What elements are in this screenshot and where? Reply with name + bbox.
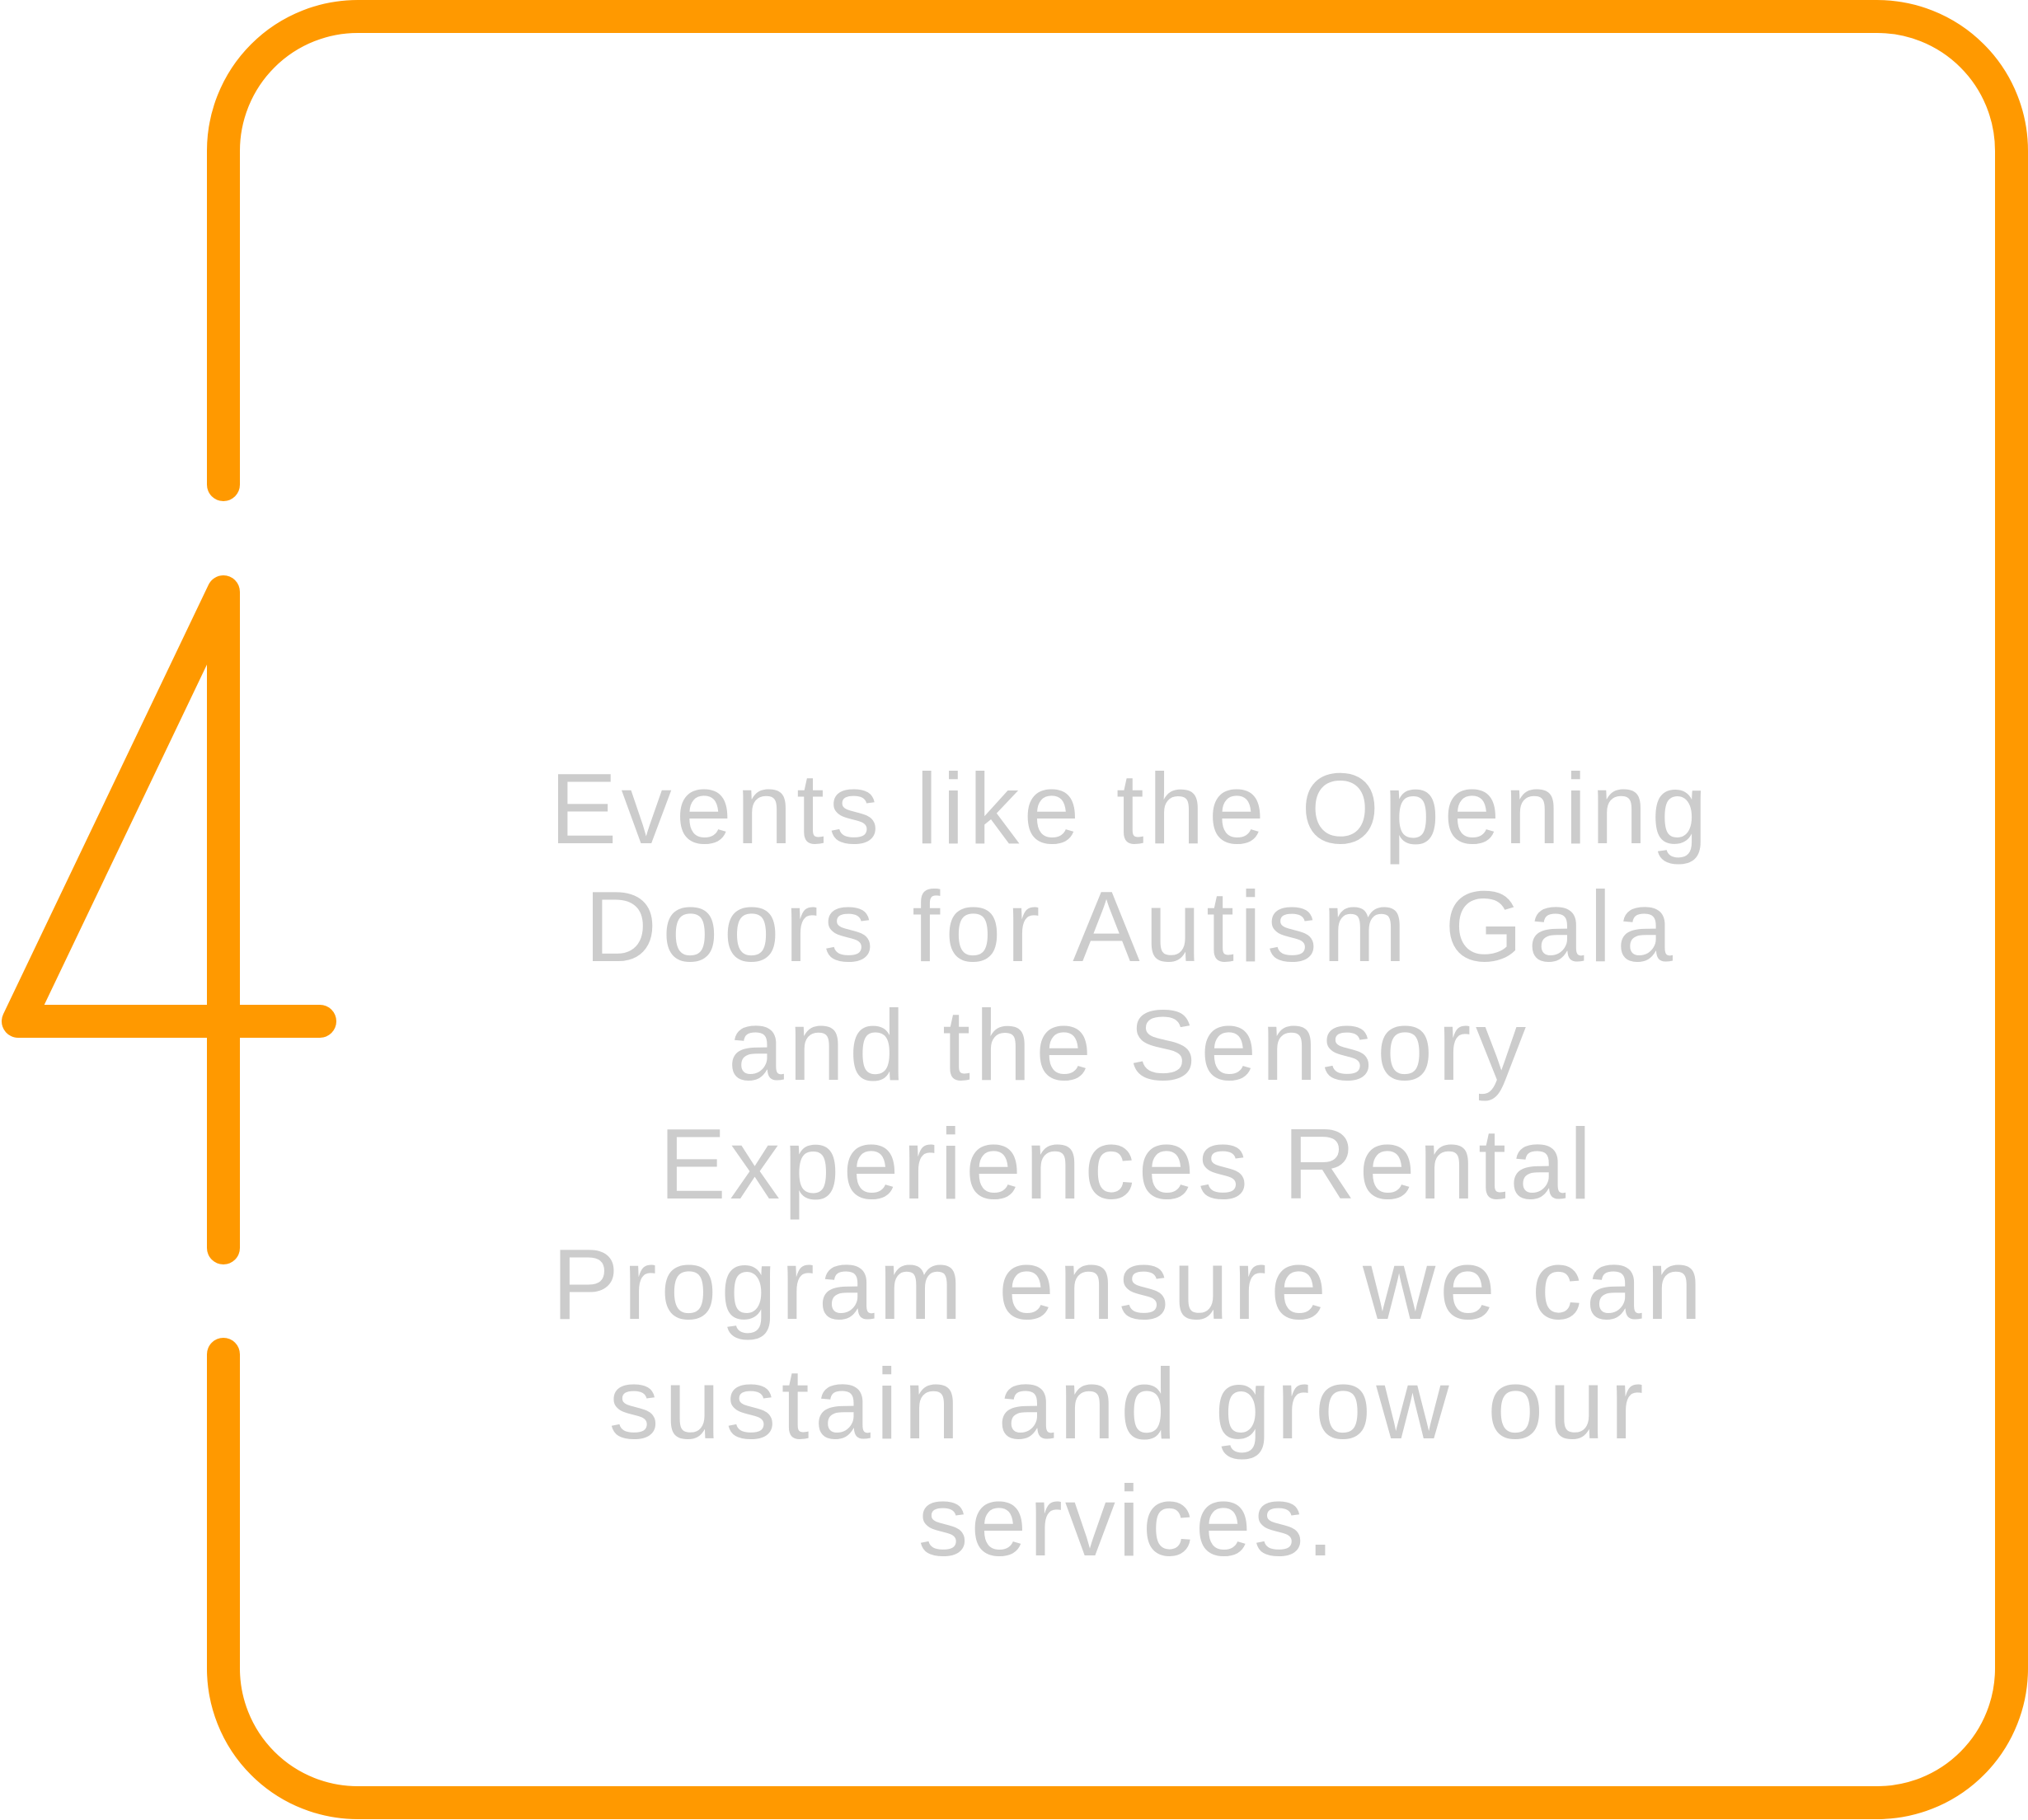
text block: description: Doors for Autism Gala [584, 870, 1673, 983]
text block: description: Program ensure we can [552, 1228, 1702, 1340]
text block: description: sustain and grow our [608, 1348, 1644, 1460]
text block: description: Events like the Opening [550, 753, 1707, 865]
text block: description: Experiences Rental [660, 1108, 1591, 1220]
text block: description [550, 753, 1707, 1577]
icon: number 4 [18, 592, 320, 1248]
text block: description: services. [918, 1465, 1334, 1577]
text block: description: and the Sensory [728, 989, 1526, 1101]
